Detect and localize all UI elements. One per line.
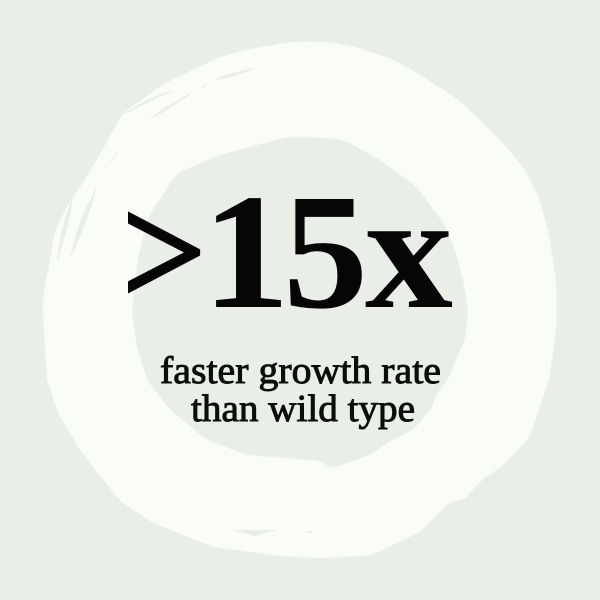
headline: >15x: > bbox=[122, 164, 205, 340]
headline: >15x bbox=[128, 198, 452, 309]
caption: faster growth rate than wild type bbox=[160, 350, 441, 430]
brush stroke ring bbox=[43, 42, 557, 558]
headline: >15x: x bbox=[365, 160, 453, 343]
headline: >15x: 5 bbox=[283, 160, 368, 343]
caption: faster growth rate than wild type: than wild type bbox=[191, 388, 415, 430]
caption: faster growth rate than wild type: faster growth rate bbox=[160, 350, 441, 392]
headline: >15x: 1 bbox=[202, 160, 290, 343]
